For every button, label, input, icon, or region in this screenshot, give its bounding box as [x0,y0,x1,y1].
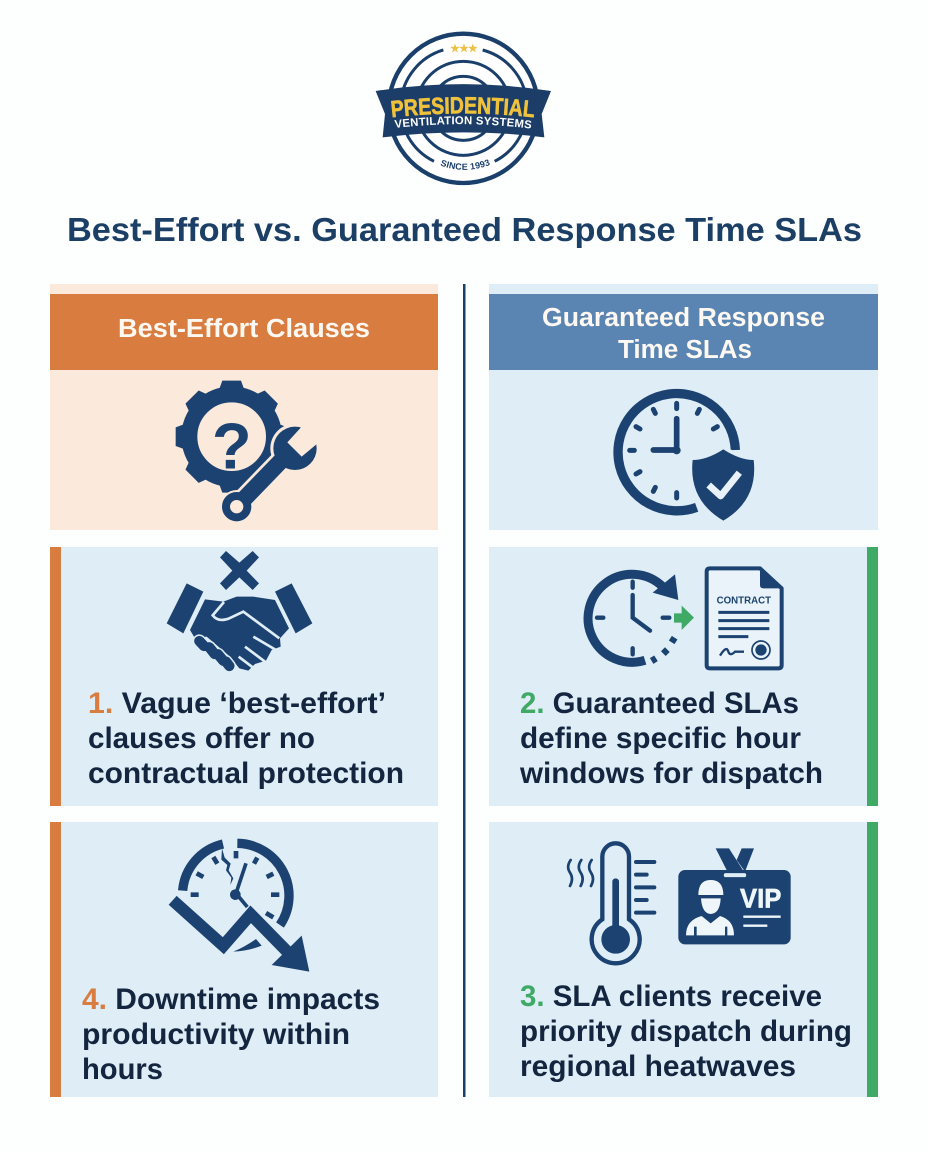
icon: clock, arrow and contract [588,568,782,668]
card: point 4 [50,822,438,1097]
text: point 2: 2. Guaranteed SLAs [520,687,799,720]
logo: Presidential Ventilation Systems: SINCE 1993 [440,160,490,170]
icon: thermometer and VIP badge: VIP [740,883,781,913]
text: point 3 [520,980,852,1083]
text: point 2: define specific hour [520,722,801,755]
panel: best-effort clauses [50,284,438,530]
card: point 2 [489,547,878,806]
text: point 4: 4. Downtime impacts [82,983,380,1016]
text: point 4 [82,983,380,1086]
text: point 4: productivity within [82,1018,350,1051]
center divider [463,284,466,1097]
heading: guaranteed response time SLAs [489,294,878,370]
logo: Presidential Ventilation Systems [376,32,551,186]
panel: guaranteed response time SLAs [489,284,878,530]
heading: best-effort clauses [50,294,438,370]
heading: guaranteed response time SLAs: Time SLAs [618,336,752,364]
logo: Presidential Ventilation Systems: ★★★ [449,41,479,55]
text: point 2 [519,687,823,790]
text: point 4: hours [82,1053,163,1086]
icon: clock with shield check [618,393,754,521]
text: point 1: 1. Vague ‘best-effort’ [88,687,386,720]
logo: Presidential Ventilation Systems: PRESIDENTIAL [391,96,534,118]
icon: thermometer and VIP badge [568,843,791,963]
text: point 2: windows for dispatch [519,757,823,790]
icon: clock, arrow and contract: CONTRACT [717,596,772,607]
text: point 1: contractual protection [88,757,404,790]
icon: broken handshake [167,551,312,671]
text: point 1: clauses offer no [88,722,315,755]
title: Best-Effort vs. Guaranteed Response Time SLAs [67,211,862,248]
logo: Presidential Ventilation Systems: VENTILATION SYSTEMS [394,116,532,128]
icon: cracked clock and falling arrow [173,843,309,972]
text: point 3: 3. SLA clients receive [520,980,822,1013]
card: point 1 [50,547,438,806]
heading: guaranteed response time SLAs: Guaranteed Response [542,304,825,332]
icon: gear with question mark and wrench: ? [212,409,252,482]
card: point 3 [489,822,878,1097]
text: point 3: priority dispatch during [520,1015,852,1048]
heading: best-effort clauses: Best-Effort Clauses [118,315,370,343]
text: point 1 [88,687,404,790]
text: point 3: regional heatwaves [520,1050,796,1083]
icon: gear with question mark and wrench [176,381,322,523]
